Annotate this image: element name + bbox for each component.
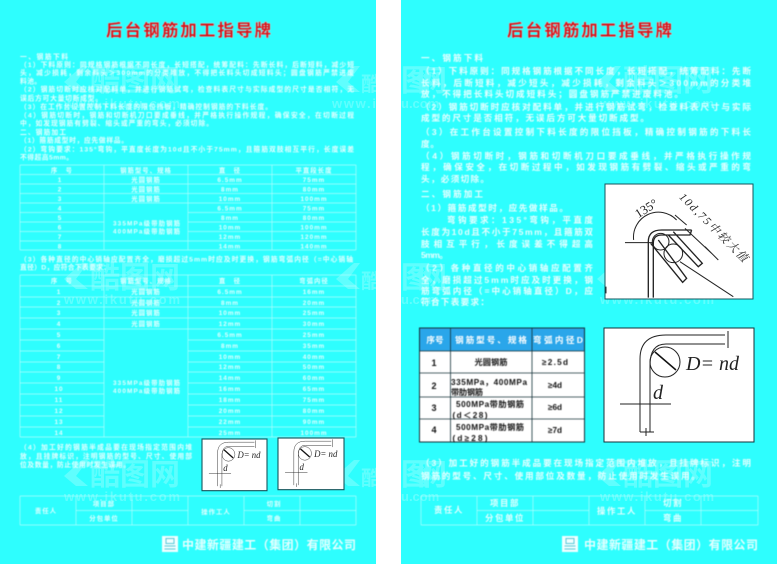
left table: bend inner diameter: 12 <box>54 408 64 415</box>
left table: hook straight length: 80mm <box>303 186 325 194</box>
left table: bend inner diameter: 16mm <box>219 386 241 393</box>
right diagram: bend detail: d <box>653 382 664 404</box>
right text block: section two: 符合下表要求： <box>421 296 489 307</box>
left diagram: bend detail 1: D= nd <box>237 450 261 460</box>
left table: hook straight length: 100mm <box>300 196 328 203</box>
watermark: u.com <box>401 96 439 111</box>
left table: bend inner diameter: 14mm <box>219 375 241 382</box>
left table: bend inner diameter: 65mm <box>303 386 325 393</box>
right text block: section one: 成型的尺寸是否相符，无误后方可大量切断成型。 <box>421 112 649 123</box>
left table: hook straight length <box>20 165 356 250</box>
left table: hook straight length: 6.5mm <box>217 177 243 184</box>
left text block: section one and two <box>20 52 354 162</box>
left table: bend inner diameter: 10mm <box>219 310 241 317</box>
left table: hook straight length: 7 <box>58 234 62 241</box>
left table: bend inner diameter: 钢筋型号、规格 <box>120 276 172 285</box>
left table: bend inner diameter: 7 <box>57 354 61 361</box>
watermark: 酷 <box>361 73 381 96</box>
left table: bend inner diameter: 25mm <box>303 332 325 339</box>
right table: bend requirements: 500MPa带肋钢筋 <box>456 399 524 409</box>
right table: bend requirements: 1 <box>431 358 437 368</box>
right company logo and name: 中建新疆建工（集团）有限公司 <box>584 537 758 552</box>
left text block: section one and two: 头，减少损耗，剩余料头＞300mm的分类堆放，不得把长料头切成短料头；圆盘钢筋严禁进废 <box>20 68 354 77</box>
left table: hook straight length: 5 <box>58 215 62 222</box>
left table: bend inner diameter: 18mm <box>219 397 241 404</box>
right table: bend requirements: (d＜28) <box>452 411 488 420</box>
right diagram: 135 degree hook <box>605 184 753 299</box>
right text block: section one: 一、钢筋下料 <box>421 52 483 63</box>
right diagram: bend detail: D= nd <box>685 353 740 375</box>
left table: hook straight length: 光圆钢筋 <box>131 184 161 194</box>
left table: hook straight length: 10mm <box>219 224 241 232</box>
right text block: section one: 度。 <box>421 138 439 149</box>
left table: bend inner diameter: 400MPa级带肋钢筋 <box>113 386 181 395</box>
left table: hook straight length: 平直段长度 <box>296 166 332 174</box>
left text block: section one and two: （3）在工作台设置控制下料长度的限位挡板，精确控制钢筋的下料长度。 <box>20 102 272 111</box>
left table: hook straight length: 100mm <box>300 224 328 232</box>
left table: bend inner diameter: 13 <box>54 419 64 426</box>
left table: bend inner diameter: 8 <box>57 364 61 371</box>
left table: bend inner diameter: 16mm <box>303 289 325 296</box>
left table: bend inner diameter: 80mm <box>303 408 325 415</box>
left table: hook straight length: 80mm <box>303 215 325 222</box>
left table: bend inner diameter: 光圆钢筋 <box>131 287 161 296</box>
left table: hook straight length: 3 <box>58 196 62 203</box>
left diagram: bend detail 2 <box>278 438 344 490</box>
right sign-off table: 责任人 <box>434 505 464 515</box>
left table: bend inner diameter: 25mm <box>219 430 241 437</box>
watermark: www.ikutu.com <box>63 489 180 504</box>
left text block: section one and two: 中，如发现钢筋有劈裂、缩头或严重的弯头，必须切除。 <box>20 118 213 128</box>
right text block: section one: （4）钢筋切断时，钢筋和切断机刀口要成垂线，并严格执行操作规 <box>421 150 751 161</box>
watermark: 酷图网 <box>90 65 180 98</box>
left table: bend inner diameter: 4 <box>57 321 61 328</box>
right text block: section two: 弯钩要求：135°弯钩，平直度 <box>447 214 593 225</box>
right table: bend requirements: 500MPa带肋钢筋 <box>456 422 524 432</box>
right table: bend requirements: 3 <box>431 403 437 413</box>
right table: bend requirements <box>420 328 584 443</box>
left text block: section one and two: 料池。 <box>20 76 41 86</box>
left table: hook straight length: 14mm <box>219 244 241 250</box>
right table: bend requirements: 光圆钢筋 <box>474 357 508 367</box>
right text block: section two: 肢相互平行，长度误差不得超高 <box>421 238 593 249</box>
left table: bend inner diameter: 14 <box>54 430 64 437</box>
left text block: section one and two: （1）箍筋成型时，应先做样品。 <box>20 136 128 144</box>
left table: hook straight length: 直 径 <box>219 166 241 174</box>
watermark: www.ikutu.com <box>599 96 714 111</box>
left table: bend inner diameter: 20mm <box>219 408 241 415</box>
left table: bend inner diameter: 10 <box>54 386 64 393</box>
left table: hook straight length: 4 <box>58 206 62 212</box>
left table: bend inner diameter: 25mm <box>303 310 325 317</box>
right text block: storage: （3）加工好的钢筋半成品要在现场指定范围内堆放，且挂牌标识，注明 <box>421 457 751 468</box>
left sign-off table: 切割 <box>267 499 281 508</box>
watermark: 酷 <box>361 270 381 293</box>
left table: hook straight length: 6.5mm <box>217 206 243 212</box>
right diagram: bend detail <box>604 328 754 442</box>
left table: bend inner diameter: 22mm <box>219 419 241 426</box>
right table: bend requirements: 带肋钢筋 <box>451 387 483 397</box>
watermark: www.ikutu.com <box>599 489 714 504</box>
left table: hook straight length: 12mm <box>219 234 241 241</box>
watermark: www.ikutu.com <box>63 96 180 111</box>
left text block: section one and two: （2）钢筋切断时应核对配料单，并进行钢筋试弯，检查料表尺寸与实际成型的尺寸是否相符，无 <box>20 84 354 94</box>
left table: bend inner diameter: 100mm <box>300 430 328 437</box>
left company logo and name: 中建新疆建工（集团）有限公司 <box>182 537 356 552</box>
left table: bend inner diameter: 9 <box>57 375 61 382</box>
left table: hook straight length: 6 <box>58 224 62 232</box>
left diagram: bend detail 2: D= nd <box>313 449 338 459</box>
left text block: section one and two: 误后方可大量切断成型。 <box>20 94 102 102</box>
left text block: storage: 放，且挂牌标识，注明钢筋的型号、尺寸、使用部 <box>20 452 192 460</box>
left text block: storage: 位及数量，防止使用时发生误用。 <box>20 460 130 469</box>
right table: bend requirements: 4 <box>431 425 437 435</box>
left table: bend inner diameter: 12mm <box>219 321 241 328</box>
watermark: 酷图网 <box>623 262 713 295</box>
right text block: section one: 头，必须切除。 <box>421 173 489 184</box>
watermark: 图网 <box>401 459 447 492</box>
panel: right sign <box>401 0 777 564</box>
right table: bend requirements: ≥2.5d <box>542 358 568 367</box>
watermark: www.ikutu.com <box>63 292 180 307</box>
left table: bend inner diameter: 12mm <box>219 364 241 371</box>
left table: bend inner diameter: 40mm <box>303 354 325 361</box>
left table: hook straight length: 8mm <box>221 215 239 222</box>
left table: hook straight length: 120mm <box>300 234 328 241</box>
left table: bend inner diameter: 5 <box>57 332 61 339</box>
left text block: section one and two: 一、钢筋下料 <box>20 52 68 61</box>
left table: bend inner diameter: 90mm <box>303 419 325 426</box>
watermark: 图网 <box>401 65 447 98</box>
right text block: section two: 长度为10d且不小于75mm，且箍筋双 <box>421 226 593 237</box>
left table: bend inner diameter <box>20 275 356 437</box>
right sign-off table: 操作工人 <box>597 506 637 516</box>
left table: bend inner diameter: 光圆钢筋 <box>131 308 161 317</box>
left table: hook straight length: 75mm <box>303 206 325 212</box>
left title: 后台钢筋加工指导牌 <box>106 20 271 40</box>
left table: bend inner diameter: 335MPa级带肋钢筋 <box>113 378 181 387</box>
right text block: section two: 二、钢筋加工 <box>421 188 483 199</box>
watermark: 酷图网 <box>90 262 180 295</box>
left table: hook straight length: 钢筋型号、规格 <box>120 166 172 174</box>
left text block: mandrel requirement: 直径）D，应符合下表要求： <box>20 262 110 272</box>
right text block: section two: 5mm。 <box>421 250 448 260</box>
right text block: section two: （1）箍筋成型时，应先做样品。 <box>421 202 568 213</box>
left sign-off table: 责任人 <box>35 506 57 515</box>
left sign-off table: 操作工人 <box>201 507 231 516</box>
watermark: www.ikutu.com <box>599 292 714 307</box>
left text block: section one and two: 不得超高5mm。 <box>20 152 73 162</box>
right text block: section two <box>421 188 593 307</box>
left table: bend inner diameter: 11 <box>55 397 63 404</box>
left table: hook straight length: 1 <box>58 177 62 184</box>
left diagram: bend detail 1: d <box>223 463 228 473</box>
left text block: section one and two: （1）下料原则：同规格钢筋根据不同长度，长短搭配，统筹配料：先断长料，后断短料，减少短 <box>20 60 354 69</box>
left diagram: bend detail 2: d <box>300 462 304 472</box>
left table: hook straight length: 75mm <box>303 177 325 184</box>
right text block: section one: 放，不得把长料头切成短料头；圆盘钢筋严禁进废料池。 <box>421 88 683 99</box>
left text block: storage <box>20 442 192 469</box>
watermark: u.com <box>401 489 439 504</box>
watermark: www.i <box>331 96 376 111</box>
right table: bend requirements: 弯弧内径D <box>533 334 583 345</box>
left diagram: bend detail 1 <box>202 439 267 491</box>
left table: hook straight length: 140mm <box>300 244 328 250</box>
right table: bend requirements: 钢筋型号、规格 <box>455 334 527 345</box>
left table: bend inner diameter: 弯弧内径 <box>299 276 329 285</box>
right text block: storage <box>421 457 751 481</box>
right text block: section one <box>421 52 751 184</box>
left table: bend inner diameter: 50mm <box>303 364 325 371</box>
right sign-off table: 弯曲 <box>663 513 683 523</box>
left table: bend inner diameter: 35mm <box>303 343 325 350</box>
right diagram: 135 degree hook: 135° <box>632 196 660 221</box>
right table: bend requirements: ≥7d <box>548 426 562 435</box>
left table: hook straight length: 400MPa级带肋钢筋 <box>113 226 181 236</box>
right sign-off table: 分包单位 <box>485 513 525 523</box>
right text block: storage: 钢筋的型号、尺寸、使用部位及数量，防止使用时发生误用。 <box>421 470 700 481</box>
right sign-off table <box>421 496 758 525</box>
left table: hook straight length: 335MPa级带肋钢筋 <box>113 218 181 228</box>
right text block: section two: 筋弯弧内径（=中心销轴直径）D，应 <box>421 285 593 296</box>
left table: hook straight length: 光圆钢筋 <box>131 175 161 184</box>
left table: bend inner diameter: 6.5mm <box>217 332 243 339</box>
left table: bend inner diameter: 直 径 <box>219 276 241 285</box>
right sign-off table: 切割 <box>663 498 683 508</box>
right text block: section one: （1）下料原则：同规格钢筋根据不同长度，长短搭配，统筹配料：先断 <box>421 65 751 76</box>
right text block: section one: （2）钢筋切断时应核对配料单，并进行钢筋试弯，检查料表尺寸与实际 <box>421 101 751 112</box>
left text block: section one and two: 二、钢筋加工 <box>20 128 66 136</box>
left table: hook straight length: 8mm <box>221 186 239 194</box>
left table: bend inner diameter: 10mm <box>219 354 241 361</box>
right text block: section one: （3）在工作台设置控制下料长度的限位挡板，精确控制钢筋的下料长 <box>421 126 751 137</box>
left table: hook straight length: 光圆钢筋 <box>131 194 161 203</box>
left text block: mandrel requirement <box>20 254 353 272</box>
right table: bend requirements: 335MPa，400MPa <box>451 378 527 387</box>
left text block: section one and two: （2）弯钩要求：135°弯钩，平直度长度为10d且不小于75mm，且箍筋双肢相互平行，长度误差 <box>20 144 354 154</box>
right sign-off table: 项目部 <box>490 498 520 508</box>
right text block: section two: 全，磨损超过5mm时应及时更换，钢 <box>421 274 593 285</box>
left text block: storage: （4）加工好的钢筋半成品要在现场指定范围内堆 <box>20 442 192 452</box>
watermark: 酷 <box>361 467 381 490</box>
left sign-off table: 分包单位 <box>89 514 119 522</box>
left sign-off table: 弯曲 <box>267 514 281 522</box>
right text block: section one: 长料，后断短料，减少短头，减少损耗，剩余料头＞300mm的分类堆 <box>421 77 751 88</box>
watermark: 图网 <box>401 262 447 295</box>
left table: hook straight length: 序 号 <box>51 166 73 174</box>
right text block: section two: （2）各种直径的中心销轴应配置齐 <box>421 262 593 273</box>
left text block: mandrel requirement: （3）各种直径的中心销轴应配置齐全，磨损超过5mm时应及时更换，钢筋弯弧内径（=中心销轴 <box>20 254 353 264</box>
left table: bend inner diameter: 6.5mm <box>217 289 243 296</box>
left table: hook straight length: 8 <box>58 244 62 250</box>
left table: bend inner diameter: 60mm <box>303 375 325 382</box>
left table: bend inner diameter: 8mm <box>221 300 239 307</box>
right table: bend requirements: ≥6d <box>548 403 562 412</box>
left sign-off table <box>20 496 356 525</box>
left table: bend inner diameter: 1 <box>57 289 61 296</box>
left table: bend inner diameter: 3 <box>57 310 61 317</box>
right table: bend requirements: 2 <box>431 381 437 391</box>
watermark: 酷图网 <box>623 459 713 492</box>
left table: hook straight length: 2 <box>58 186 62 194</box>
right diagram: 135 degree hook: 10d,75中较大值 <box>677 191 752 266</box>
watermark: 酷图网 <box>90 459 180 492</box>
left table: bend inner diameter: 30mm <box>303 321 325 328</box>
left table: bend inner diameter: 光圆钢筋 <box>131 319 161 328</box>
left text block: section one and two: （4）钢筋切断时，钢筋和切断机刀口要成垂线，并严格执行操作规程，确保安全，在切断过程 <box>20 110 354 120</box>
left table: bend inner diameter: 75mm <box>303 397 325 404</box>
left table: bend inner diameter: 序 号 <box>51 276 73 285</box>
left table: bend inner diameter: 6 <box>57 343 61 350</box>
right title: 后台钢筋加工指导牌 <box>507 20 672 40</box>
left table: bend inner diameter: 8mm <box>221 343 239 350</box>
right text block: section one: 程，确保安全，在切断过程中，如发现钢筋有劈裂、缩头或严重的弯 <box>421 161 751 172</box>
left table: hook straight length: 10mm <box>219 196 241 203</box>
right table: bend requirements: ≥4d <box>548 381 562 390</box>
panel: left sign <box>0 0 376 564</box>
left table: bend inner diameter: 20mm <box>303 300 325 307</box>
watermark: u.com <box>401 292 439 307</box>
right table: bend requirements: (d≥28) <box>452 434 488 443</box>
left table: bend inner diameter: 光圆钢筋 <box>131 298 161 307</box>
left sign-off table: 项目部 <box>93 499 115 508</box>
watermark: 酷图网 <box>623 65 713 98</box>
watermark <box>63 65 714 504</box>
left table: bend inner diameter: 2 <box>57 300 61 307</box>
right table: bend requirements: 序号 <box>426 334 444 345</box>
